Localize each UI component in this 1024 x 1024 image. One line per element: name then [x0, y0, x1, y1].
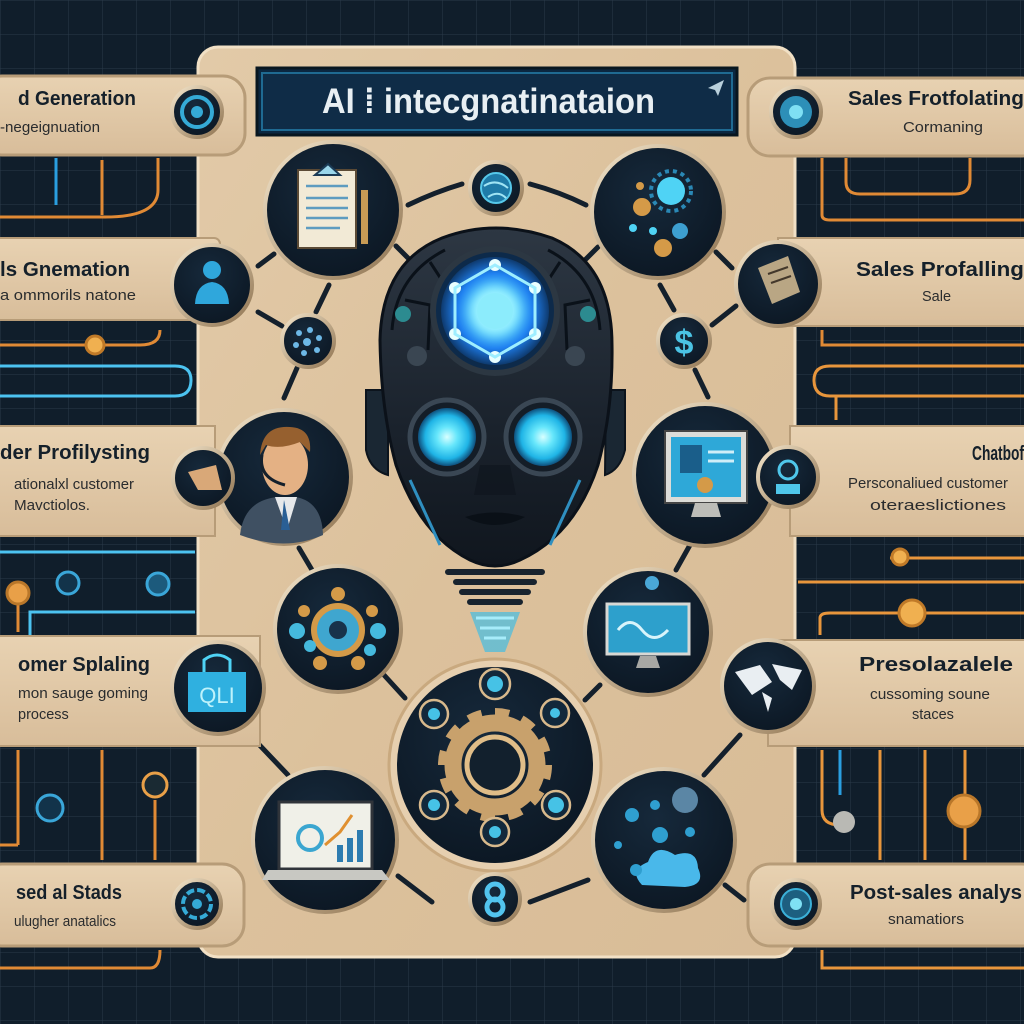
icon: gear: [443, 713, 547, 817]
node: clipboard: [265, 142, 401, 278]
card: right 4: Presolazalele: [859, 654, 1013, 676]
card: right 2: [736, 238, 1024, 326]
panel: central beige board: [198, 47, 795, 957]
lightbulb stand: [448, 572, 542, 652]
card: left 4: [0, 636, 264, 746]
icon: rings: [487, 884, 503, 915]
card: left 2: a ommorils natone: [0, 288, 136, 304]
icon: globe: [481, 173, 511, 203]
card: right 3: Persconaliued customer: [848, 476, 1008, 492]
card: right 4: staces: [912, 707, 954, 723]
icon: cloud: [614, 787, 700, 887]
card: right 5: [748, 864, 1024, 946]
card: right 3: oteraeslictiones: [870, 498, 1006, 514]
card: left 2: ls Gnemation: [0, 259, 130, 281]
card: left 1 lead generation: [0, 76, 245, 155]
title banner: [257, 68, 737, 135]
card: right 1: [748, 78, 1024, 156]
node: central gear hub: [389, 659, 601, 871]
icon: person: [172, 245, 252, 325]
node: monitor profile: [634, 404, 776, 546]
icon: hand: [173, 448, 233, 508]
card: right 1: Cormaning: [903, 120, 983, 136]
icon: [172, 87, 222, 137]
connector arcs: [250, 184, 744, 902]
head plates: [392, 250, 600, 350]
icon: [772, 880, 820, 928]
small satellites: [420, 669, 570, 846]
node: bottom small: [470, 874, 520, 924]
node: central gears cluster left: [275, 566, 401, 692]
card: right 4: [722, 640, 1024, 746]
card: right 3: [758, 426, 1024, 536]
icon: screen: [607, 576, 689, 668]
card: right 5: Post-sales analys: [850, 882, 1022, 904]
icon: shopping bag: QLI: [199, 683, 235, 708]
icon: world map: [722, 640, 814, 732]
card: left 3: der Profilysting: [0, 442, 150, 464]
eyes: [410, 400, 580, 474]
node: small network left: [282, 315, 334, 367]
card: right 2: Sale: [922, 289, 951, 305]
node: top small: [470, 162, 522, 214]
title text: AI ⁞ intecgnatinataion: [322, 82, 655, 121]
node: cloud cluster: [593, 769, 735, 911]
node: monitor wave: [585, 569, 711, 695]
icon: robot: [758, 447, 818, 507]
head: [380, 228, 612, 566]
node: agent: [217, 410, 351, 544]
icon: [173, 880, 221, 928]
card: left 5: ulugher anatalics: [14, 914, 116, 930]
card: left 3: [0, 426, 233, 536]
card: left 5: sed al Stads: [16, 882, 122, 904]
circuit traces: left: [0, 158, 195, 968]
face: AI head: [366, 228, 625, 566]
icon: hub: [289, 587, 386, 670]
icon: shopping bag: [172, 642, 264, 734]
card: left 3: ationalxl customer: [14, 477, 134, 493]
card: left 3: Mavctiolos.: [14, 498, 90, 514]
card: left 4: mon sauge goming: [18, 686, 148, 702]
card: right 4: cussoming soune: [870, 687, 990, 703]
card: left 1 lead generation: -negeignuation: [0, 120, 100, 136]
card: left 2: [0, 238, 252, 325]
node: dollar small right: [658, 315, 710, 367]
icon: monitor: [665, 431, 747, 517]
card: left 5: [0, 864, 244, 946]
icon: agent illustration: [240, 427, 323, 544]
card: left 4: process: [18, 707, 69, 723]
card: right 5: snamatiors: [888, 912, 964, 928]
icon: clipboard: [298, 164, 368, 248]
headphones: [366, 390, 388, 475]
forehead orb: [433, 249, 557, 373]
icon: papers: [736, 242, 820, 326]
node: gears top right: [592, 146, 724, 278]
icon: dots: [293, 327, 322, 356]
nose and mouth: [474, 465, 516, 495]
icon: dollar: $: [675, 324, 694, 362]
icon: laptop: [262, 802, 390, 880]
card: right 2: Sales Profalling: [856, 259, 1024, 281]
icon: [771, 87, 821, 137]
node: laptop chart: [253, 768, 397, 912]
card: left 1 lead generation: d Generation: [18, 88, 136, 110]
card: right 1: Sales Frotfolating: [848, 88, 1024, 110]
icon: molecule gears: [629, 171, 691, 257]
card: left 4: omer Splaling: [18, 654, 150, 676]
circuit traces: right: [798, 158, 1024, 968]
